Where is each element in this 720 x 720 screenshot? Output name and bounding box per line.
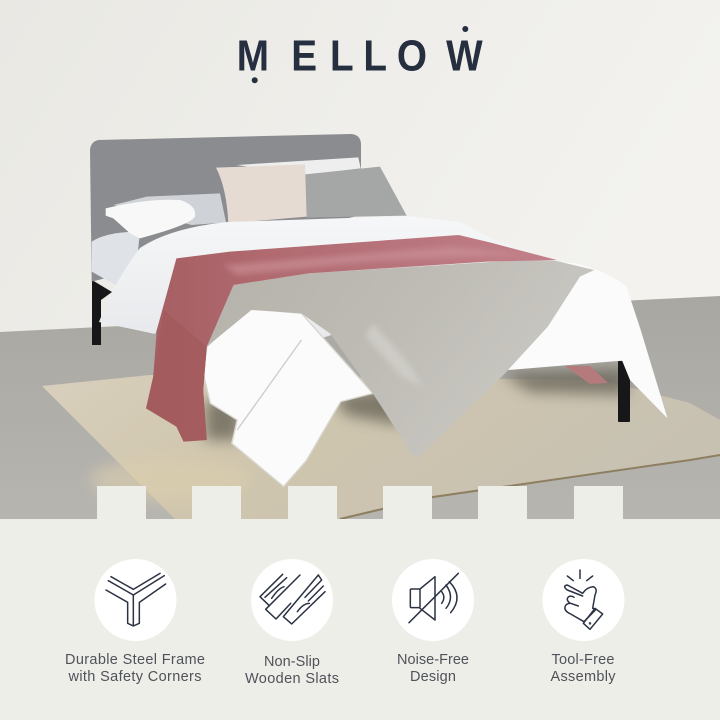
rug fringe edge	[340, 455, 720, 519]
white duvet right drop	[451, 258, 667, 418]
bed headboard and pillows	[90, 134, 407, 295]
duvet top	[99, 216, 560, 345]
pink throw lower shade	[146, 310, 207, 442]
duvet quilt seam	[237, 340, 301, 430]
icon: finger snap	[565, 570, 603, 629]
white pillow	[106, 200, 195, 238]
logo dot left	[252, 77, 258, 83]
rug	[42, 375, 720, 519]
logo wordmark: MELLOW	[237, 30, 484, 80]
icon: steel corner	[106, 573, 166, 626]
logo dot right	[462, 26, 468, 32]
label: Assembly	[550, 669, 616, 685]
grey throw fold highlight	[366, 323, 423, 387]
headboard	[90, 134, 361, 282]
beige cushion	[216, 164, 307, 223]
feature: noise free	[392, 559, 474, 685]
white back pillow	[237, 157, 361, 175]
shadow under bed	[205, 368, 628, 440]
label: Wooden Slats	[245, 671, 339, 687]
icon circle	[251, 559, 333, 641]
icon: muted speaker	[409, 573, 458, 623]
feature: steel frame	[65, 559, 205, 685]
label: Design	[410, 669, 456, 685]
grey left pillow	[113, 193, 226, 225]
label: Durable Steel Frame	[65, 652, 205, 668]
mattress	[92, 232, 140, 295]
rug patch highlight	[90, 458, 250, 502]
pink fabric under bed	[565, 366, 608, 384]
bottom feature panel	[0, 519, 720, 720]
icon circle	[94, 559, 176, 641]
draped bedding	[146, 235, 667, 487]
back right bed leg	[618, 361, 630, 422]
grey throw	[207, 260, 594, 460]
label: with Safety Corners	[68, 669, 202, 685]
floor	[0, 296, 720, 520]
white duvet front drop	[203, 308, 373, 487]
pink throw highlight band	[223, 247, 523, 275]
panel tabs	[97, 486, 623, 520]
feature: tool free	[542, 559, 624, 685]
wall background	[0, 0, 720, 340]
icon: wooden planks	[260, 574, 325, 624]
label: Non-Slip	[264, 654, 320, 670]
label: Noise-Free	[397, 652, 469, 668]
pink throw	[146, 235, 557, 442]
feature: wooden slats	[245, 559, 339, 687]
grey pillow	[305, 167, 407, 218]
icon circle	[392, 559, 474, 641]
logo	[237, 26, 484, 83]
icon circle	[542, 559, 624, 641]
front left bed leg	[92, 280, 112, 345]
label: Tool-Free	[552, 652, 614, 668]
